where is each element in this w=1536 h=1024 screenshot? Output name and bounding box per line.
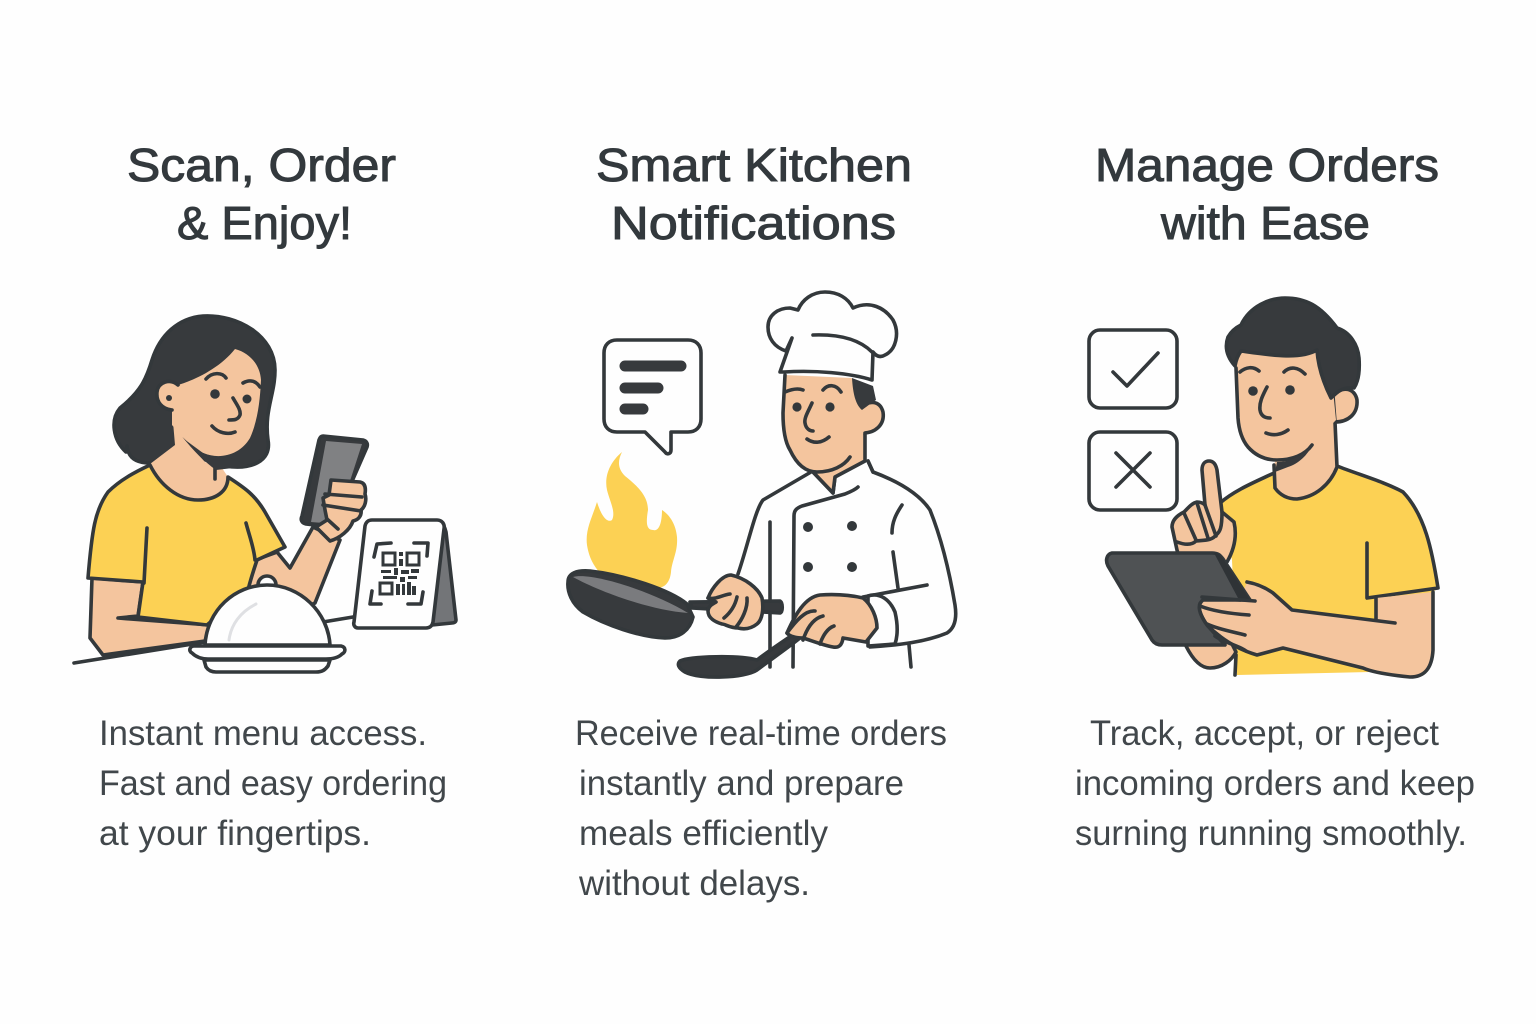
description: manage orders with ease: surning running smoothly. [1075,814,1467,853]
description: scan order enjoy: at your fingertips. [99,814,371,853]
illustration: man with tablet [1089,298,1438,677]
description: manage orders with ease: Track, accept, or reject [1090,714,1439,753]
chef hair [852,378,876,410]
woman hair [114,316,275,467]
description: smart kitchen notifications: without delays. [578,864,810,903]
left hand holding pan [708,575,763,629]
woman neck [150,410,228,500]
description: scan order enjoy [99,714,447,853]
smartphone [301,436,367,527]
man yellow shirt [1220,466,1438,675]
heading: smart kitchen notifications [596,139,912,249]
heading: manage orders with ease: with Ease [1160,197,1370,249]
panel: smart kitchen notifications [568,139,956,903]
description: smart kitchen notifications: Receive real-time orders [575,714,947,753]
chef facial features [785,386,841,442]
right hand with cuff [787,595,897,647]
chef jacket [738,461,956,667]
man hair [1226,298,1359,398]
woman ear outline [157,381,178,410]
speech bubble notification [604,340,701,454]
man lower hand behind tablet [1186,640,1236,668]
description: smart kitchen notifications [575,714,947,903]
chef ear [860,402,883,433]
illustration: chef cooking [568,292,956,677]
man arm with tablet hand [1199,582,1433,677]
description: scan order enjoy: Fast and easy ordering [99,764,447,803]
tablet [1107,553,1250,645]
description: manage orders with ease: incoming orders and keep [1075,764,1475,803]
man facial features [1240,368,1312,472]
description: scan order enjoy: Instant menu access. [99,714,427,753]
description: smart kitchen notifications: meals efficiently [579,814,828,853]
woman yellow shirt [88,465,285,625]
illustration: woman scanning QR code [74,316,456,672]
woman left arm [90,578,210,655]
woman facial features [166,374,260,479]
man neck [1274,415,1337,499]
panel: scan, order and enjoy [74,139,456,853]
QR code [370,543,428,604]
frying pan [568,571,782,638]
man tablet hand fingers [1200,597,1255,651]
heading: scan order enjoy: Scan, Order [127,139,396,191]
spatula [678,632,800,677]
man ear [1333,389,1357,422]
heading: scan order enjoy: & Enjoy! [177,197,352,249]
heading: manage orders with ease [1095,139,1439,249]
heading: scan order enjoy [127,139,396,249]
man face [1236,345,1336,460]
description: smart kitchen notifications: instantly and prepare [579,764,904,803]
man raised hand pointing [1172,461,1235,562]
jacket buttons [803,521,857,572]
serving cloche and plate [190,576,345,672]
panel: manage orders with ease [1075,139,1475,853]
chef hat [768,292,896,380]
chef neck [813,430,865,493]
woman right arm [245,527,340,620]
icon: reject checkbox [1089,432,1177,510]
icon: accept checkbox [1089,330,1177,408]
hand holding phone [316,480,366,541]
heading: smart kitchen notifications: Notifications [611,197,896,249]
heading: manage orders with ease: Manage Orders [1095,139,1439,191]
heading: smart kitchen notifications: Smart Kitchen [596,139,912,191]
QR code table tent [354,520,456,628]
table line [74,617,353,663]
chef face [783,375,873,493]
description: manage orders with ease [1075,714,1475,853]
flame [587,452,677,588]
woman face [157,349,261,456]
